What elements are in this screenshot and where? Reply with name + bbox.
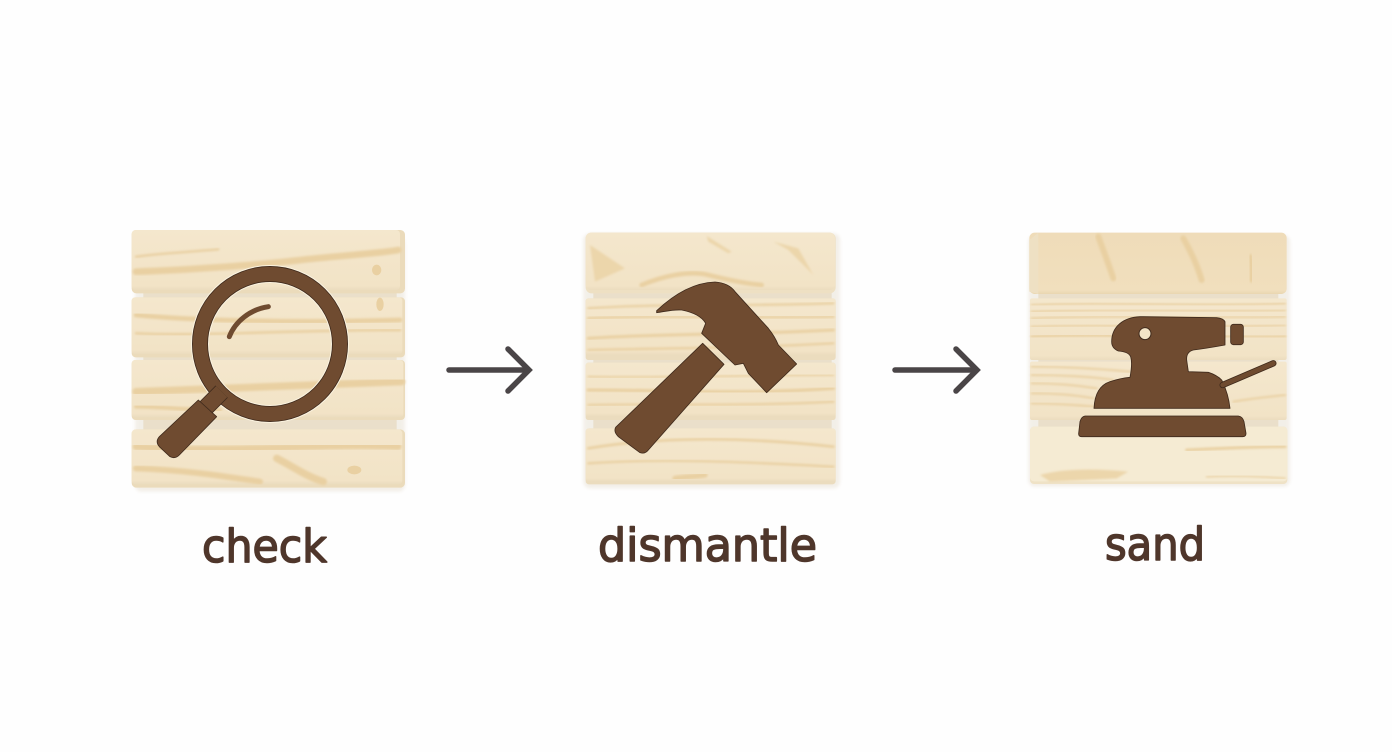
icon: magnifying glass	[157, 274, 340, 458]
icon: orbital sander	[1079, 317, 1273, 437]
label: sand: sand	[1105, 518, 1205, 571]
panel: sand	[1028, 233, 1290, 487]
icon: hammer	[615, 282, 797, 453]
panel: check	[132, 230, 405, 492]
label: dismantle: dismantle	[598, 519, 817, 572]
arrow: dismantle to sand	[895, 349, 977, 391]
arrow: check to dismantle	[449, 349, 529, 391]
panel: dismantle	[583, 233, 840, 488]
label: check: check	[202, 520, 327, 573]
